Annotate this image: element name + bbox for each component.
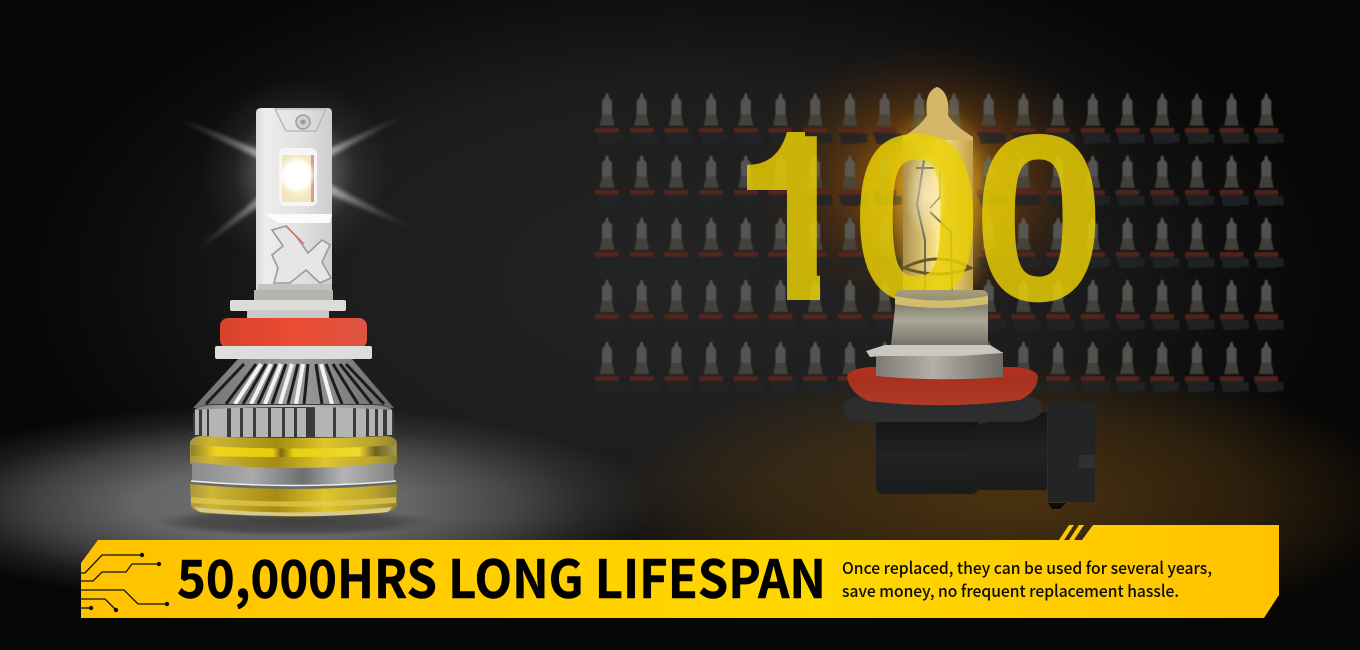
- icon: circuit lines: [81, 553, 169, 612]
- red ring: [220, 318, 367, 348]
- fin ring: [193, 404, 394, 438]
- glass collar: [891, 290, 988, 345]
- shadow on floor: [153, 508, 433, 536]
- big number 100: 100: [729, 86, 1096, 351]
- filament glow: [904, 153, 948, 237]
- halo: [200, 77, 390, 267]
- big number 100: [747, 132, 1096, 302]
- description: [842, 555, 1212, 602]
- filament supports: [904, 160, 971, 293]
- accent stripes: [1059, 525, 1084, 540]
- red rubber ring: [847, 367, 1038, 405]
- LED bulb: [153, 77, 433, 536]
- heading: 50,000HRS LONG LIFESPAN: [177, 538, 826, 614]
- grid of 100 small halogen bulbs: [589, 92, 1289, 394]
- banner shape: [81, 525, 1279, 618]
- light rays: [170, 115, 412, 255]
- gold base: [190, 436, 397, 516]
- description: Once replaced, they can be used for several years,: [842, 555, 1212, 579]
- bulb inner glow: [893, 115, 983, 305]
- halogen bulb base: [843, 290, 1095, 509]
- cone fins: [193, 359, 394, 408]
- metal flange: [876, 352, 1003, 379]
- halogen bulb: [893, 87, 983, 305]
- description: save money, no frequent replacement hassle.: [842, 578, 1179, 602]
- LED chip: [279, 148, 317, 206]
- white ring: [215, 346, 372, 359]
- banner: [81, 525, 1279, 618]
- black plug body: [843, 397, 1095, 509]
- glass envelope: [903, 87, 973, 293]
- collar and white flange: [230, 290, 346, 319]
- glow behind halogen bulb: [750, 45, 1110, 315]
- heat sink column: [256, 108, 332, 293]
- glass tip highlight: [903, 87, 973, 140]
